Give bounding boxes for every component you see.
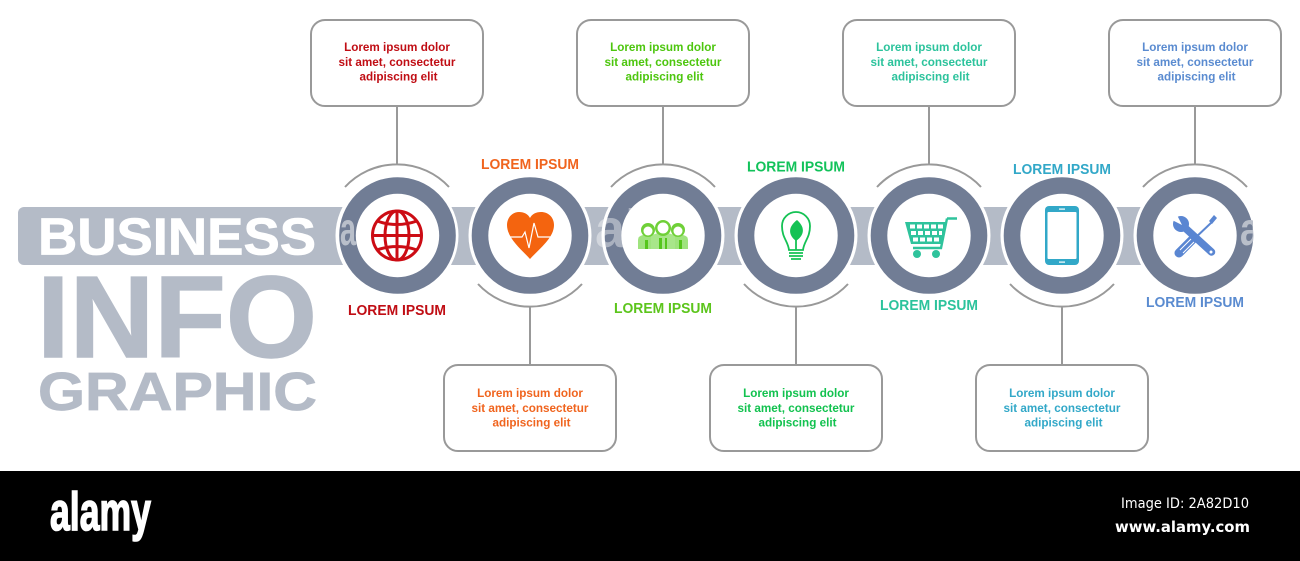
label: LOREM IPSUM [614,301,712,317]
label: LOREM IPSUM [348,303,446,319]
text box: Lorem ipsum dolor [477,387,583,400]
step 4: emerald [710,160,882,451]
connector [1143,106,1247,187]
image id: Image ID: 2A82D10 [1121,496,1249,512]
connector [744,284,848,365]
icon: heart [507,212,554,259]
text box [444,365,616,451]
title line: graphic: GRAPHIC [38,362,317,422]
ring [1134,174,1256,297]
text box [710,365,882,451]
text box: adipiscing elit [493,416,571,430]
text box: sit amet, consectetur [1137,56,1254,69]
title line: business: BUSINESS [38,208,316,266]
label: LOREM IPSUM [1146,295,1244,311]
text box: Lorem ipsum dolor [876,41,982,54]
text box: Lorem ipsum dolor [1142,41,1248,54]
icon: wrench and screwdriver [1170,213,1217,254]
footer logo: alamy [50,482,151,542]
text box: Lorem ipsum dolor [610,41,716,54]
connector [611,106,715,187]
icon: people [638,220,688,249]
text box [976,365,1148,451]
icon: smartphone [1045,206,1079,265]
label: LOREM IPSUM [481,157,579,173]
connector [345,106,449,187]
text box: sit amet, consectetur [605,56,722,69]
text box: adipiscing elit [759,416,837,430]
text box: Lorem ipsum dolor [743,387,849,400]
text box [577,20,749,106]
watermark fragments [340,208,1253,248]
text box: sit amet, consectetur [472,402,589,415]
text box: sit amet, consectetur [339,56,456,69]
text box: adipiscing elit [1025,416,1103,430]
text box: adipiscing elit [892,70,970,84]
text box [311,20,483,106]
footer bar [0,471,1300,561]
ring [868,174,990,297]
text box: Lorem ipsum dolor [1009,387,1115,400]
label: LOREM IPSUM [1013,162,1111,178]
step 1: red [311,20,483,319]
step 3: green [577,20,749,317]
step 2: orange [444,157,616,451]
text box [843,20,1015,106]
label: LOREM IPSUM [747,160,845,176]
watermark fragments: al [595,199,640,259]
text box: sit amet, consectetur [1004,402,1121,415]
icon: globe [372,211,422,260]
title [37,208,317,422]
text box: adipiscing elit [1158,70,1236,84]
title line: info: INFO [37,252,317,382]
horizontal band [18,207,1195,265]
text box: sit amet, consectetur [738,402,855,415]
ring [602,174,724,297]
step 6: cyan [976,162,1148,451]
watermark fragments: a [1240,203,1260,255]
connector [1010,284,1114,365]
step 5: teal [843,20,1015,314]
label: LOREM IPSUM [880,298,978,314]
step 7: blue [1109,20,1281,311]
text box: sit amet, consectetur [871,56,988,69]
ring [1000,174,1124,297]
text box: Lorem ipsum dolor [344,41,450,54]
watermark fragments: a [340,203,356,255]
ring [468,174,592,297]
website: www.alamy.com [1115,518,1250,536]
icon: light bulb [782,212,810,259]
connector [478,284,582,365]
text box: adipiscing elit [360,70,438,84]
connector [877,106,981,187]
text box: adipiscing elit [626,70,704,84]
ring [336,174,458,297]
ring [734,174,858,297]
icon: shopping cart [905,218,957,258]
text box [1109,20,1281,106]
